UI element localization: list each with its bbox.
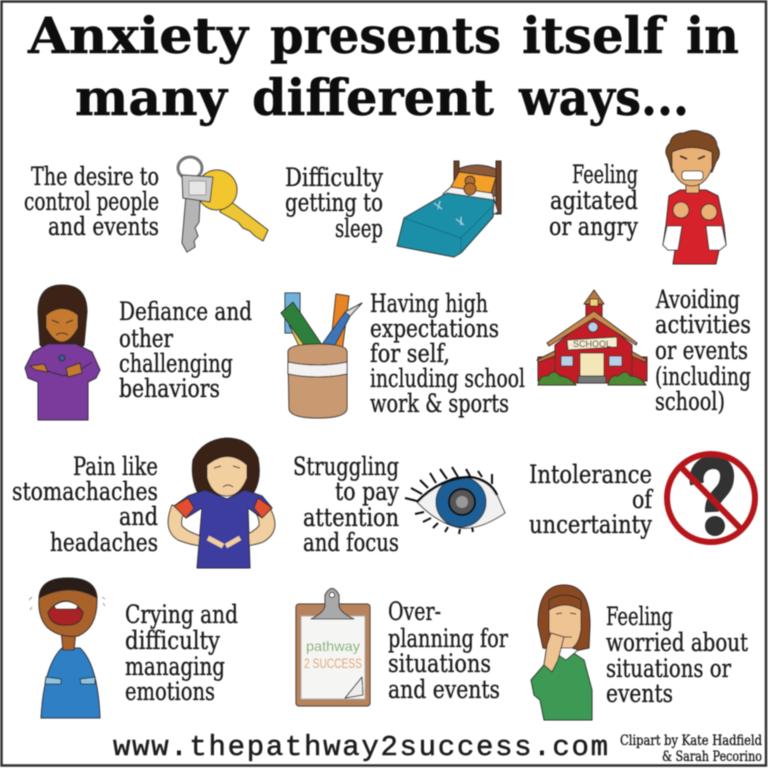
text: uncertainty: Intolerance (529, 460, 652, 489)
text: agitated: agitated (550, 186, 638, 215)
icon: woman in pain (168, 438, 275, 568)
text: over-planning: situations (388, 649, 491, 678)
text: over-planning: Over- (388, 597, 441, 626)
text: control (24, 162, 159, 241)
text: pain: stomachaches (12, 477, 158, 506)
text: expectations: expectations (370, 314, 499, 343)
text: worried: situations or (606, 654, 731, 683)
text: worried: events (606, 679, 673, 708)
text: control: control people (24, 187, 159, 216)
title: presents (270, 6, 501, 65)
text: sleep: getting to (285, 188, 383, 217)
text: uncertainty: of (632, 485, 653, 514)
text: agitated: or angry (549, 212, 639, 241)
icon: clipboard: pathway (306, 638, 360, 654)
icon: worried woman (531, 585, 592, 720)
text: defiance: Defiance and (119, 297, 252, 326)
text: defiance: other (119, 324, 173, 353)
text: avoiding: Avoiding (655, 285, 740, 314)
text: pain: and (119, 502, 158, 531)
text: uncertainty (529, 460, 653, 539)
icon: clipboard (296, 588, 370, 706)
icon: eye (405, 467, 505, 534)
text: crying: emotions (125, 677, 215, 706)
icon: prohibited question mark (667, 454, 755, 542)
text: attention: Struggling (293, 452, 399, 481)
text: attention: and focus (303, 528, 399, 557)
text: sleep (285, 163, 384, 243)
text: avoiding (655, 285, 751, 416)
text: expectations (370, 289, 525, 418)
text: expectations: including school (370, 364, 525, 393)
text: crying: difficulty (125, 626, 221, 655)
text: crying: managing (125, 652, 225, 681)
text: expectations: Having high (370, 289, 488, 318)
text: over-planning: and events (388, 675, 500, 704)
text: agitated: Feeling (572, 160, 638, 189)
text: agitated (549, 160, 639, 241)
icon: clipboard: 2 SUCCESS (304, 655, 362, 671)
text: avoiding: school) (655, 387, 725, 416)
title: in (686, 6, 739, 65)
text: over-planning (388, 597, 508, 704)
text: worried: Feeling (606, 602, 673, 631)
text: worried (606, 602, 748, 708)
icon: angry boy (663, 130, 726, 264)
text: attention (293, 452, 400, 557)
icon: school (537, 290, 647, 385)
text: control: and events (48, 212, 159, 241)
website url: www.thepathway2success.com (113, 731, 608, 764)
text: pain: Pain like (73, 452, 158, 481)
icon: school: SCHOOL (573, 339, 611, 349)
icon: crying boy (29, 578, 105, 718)
text: avoiding: activities (655, 310, 751, 339)
title: Anxiety (27, 6, 250, 65)
text: attention: to pay (335, 477, 400, 506)
text: expectations: for self, (370, 339, 450, 368)
text: sleep: Difficulty (285, 163, 384, 192)
text: defiance: behaviors (119, 374, 220, 403)
text: defiance (119, 297, 252, 403)
text: crying: Crying and (125, 600, 238, 629)
text: pain (12, 452, 158, 557)
text: crying (125, 600, 238, 706)
title: ways... (518, 68, 689, 127)
icon: pencil cup (281, 293, 362, 418)
clipart credit (620, 733, 762, 765)
text: uncertainty: uncertainty (529, 510, 653, 539)
text: pain: headaches (50, 528, 158, 557)
title: itself (522, 6, 667, 65)
icon: bed (397, 161, 501, 257)
text: expectations: work & sports (370, 389, 509, 418)
icon: keys (178, 157, 268, 252)
text: attention: attention (303, 503, 399, 532)
text: sleep: sleep (335, 214, 383, 243)
title: different (252, 68, 494, 127)
title: many (75, 68, 229, 127)
text: defiance: challenging (119, 349, 233, 378)
title (27, 6, 739, 127)
text: over-planning: planning for (388, 624, 508, 653)
icon: defiant girl (25, 285, 100, 420)
text: control: The desire to (31, 162, 159, 191)
